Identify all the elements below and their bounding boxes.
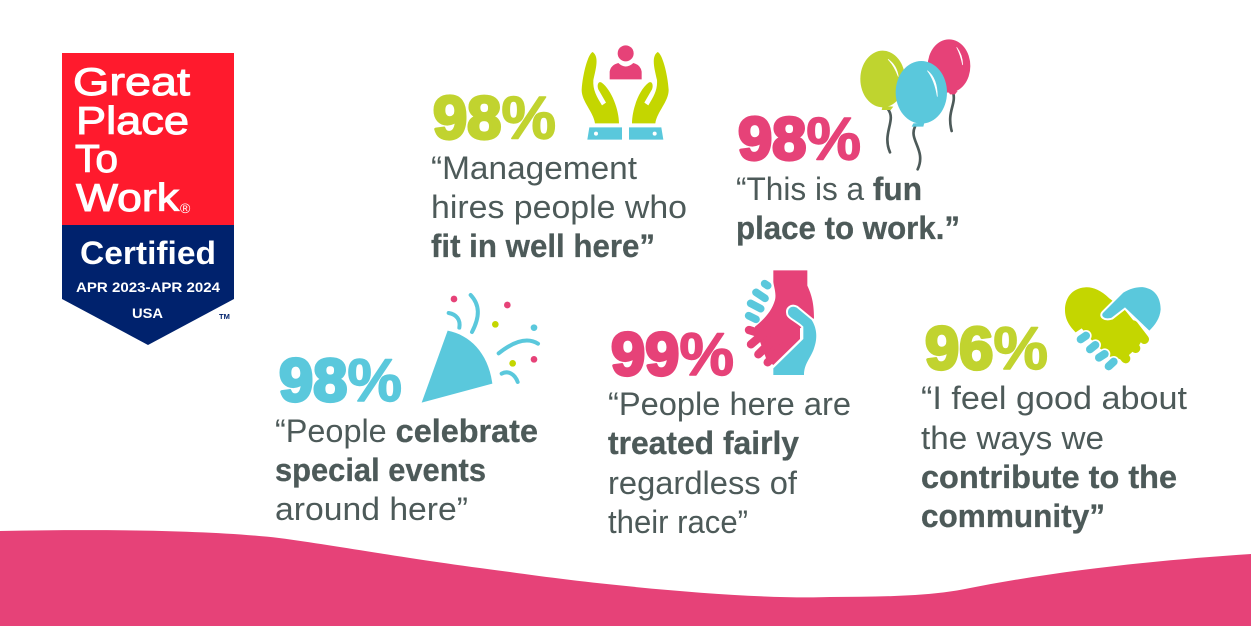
certification badge — [62, 53, 234, 345]
stat: fun place — [736, 39, 970, 246]
quote: “People here are — [608, 386, 851, 422]
trademark: TM — [219, 312, 230, 321]
icon: hands holding person — [582, 45, 669, 140]
percentage: 96% — [925, 315, 1048, 382]
quote — [608, 386, 851, 540]
quote — [736, 171, 960, 246]
quote — [921, 380, 1187, 534]
stat: celebrate events — [275, 295, 538, 527]
quote: contribute to the — [921, 459, 1177, 495]
certification dates: APR 2023-APR 2024 — [76, 279, 220, 295]
quote: “People celebrate — [275, 413, 538, 449]
quote — [275, 413, 538, 527]
quote: the ways we — [921, 420, 1104, 456]
country: USA — [132, 305, 163, 321]
icon: handshake heart — [1065, 287, 1161, 366]
quote: treated fairly — [608, 425, 799, 461]
quote: around here” — [275, 491, 468, 527]
badge title: Place — [76, 100, 189, 143]
badge title: Work — [76, 177, 180, 220]
percentage: 98% — [433, 84, 556, 152]
quote: community” — [921, 498, 1105, 534]
badge red panel — [62, 53, 234, 225]
quote: hires people who — [431, 189, 687, 225]
badge title: Great — [73, 61, 190, 104]
stat: treated fairly — [608, 270, 851, 540]
badge navy pennant — [62, 225, 234, 345]
stat: management hires — [431, 45, 687, 264]
quote: “Management — [431, 150, 637, 186]
registered mark: ® — [180, 200, 191, 216]
badge title — [73, 61, 190, 220]
quote: regardless of — [608, 465, 797, 501]
quote: “I feel good about — [921, 380, 1187, 416]
quote: place to work.” — [736, 210, 960, 246]
icon: balloons — [860, 39, 970, 169]
percentage: 98% — [738, 106, 861, 172]
quote: their race” — [608, 504, 748, 540]
icon: party popper — [422, 295, 538, 403]
pink wave footer — [0, 530, 1251, 626]
icon: clasped hands — [749, 270, 816, 375]
quote — [431, 150, 687, 264]
quote: “This is a fun — [736, 171, 922, 207]
stat: contribute to community — [921, 287, 1187, 534]
quote: fit in well here” — [431, 228, 655, 264]
percentage: 98% — [279, 347, 402, 414]
certified label: Certified — [80, 235, 216, 271]
percentage: 99% — [611, 321, 734, 388]
quote: special events — [275, 452, 486, 488]
badge title: To — [75, 138, 118, 181]
